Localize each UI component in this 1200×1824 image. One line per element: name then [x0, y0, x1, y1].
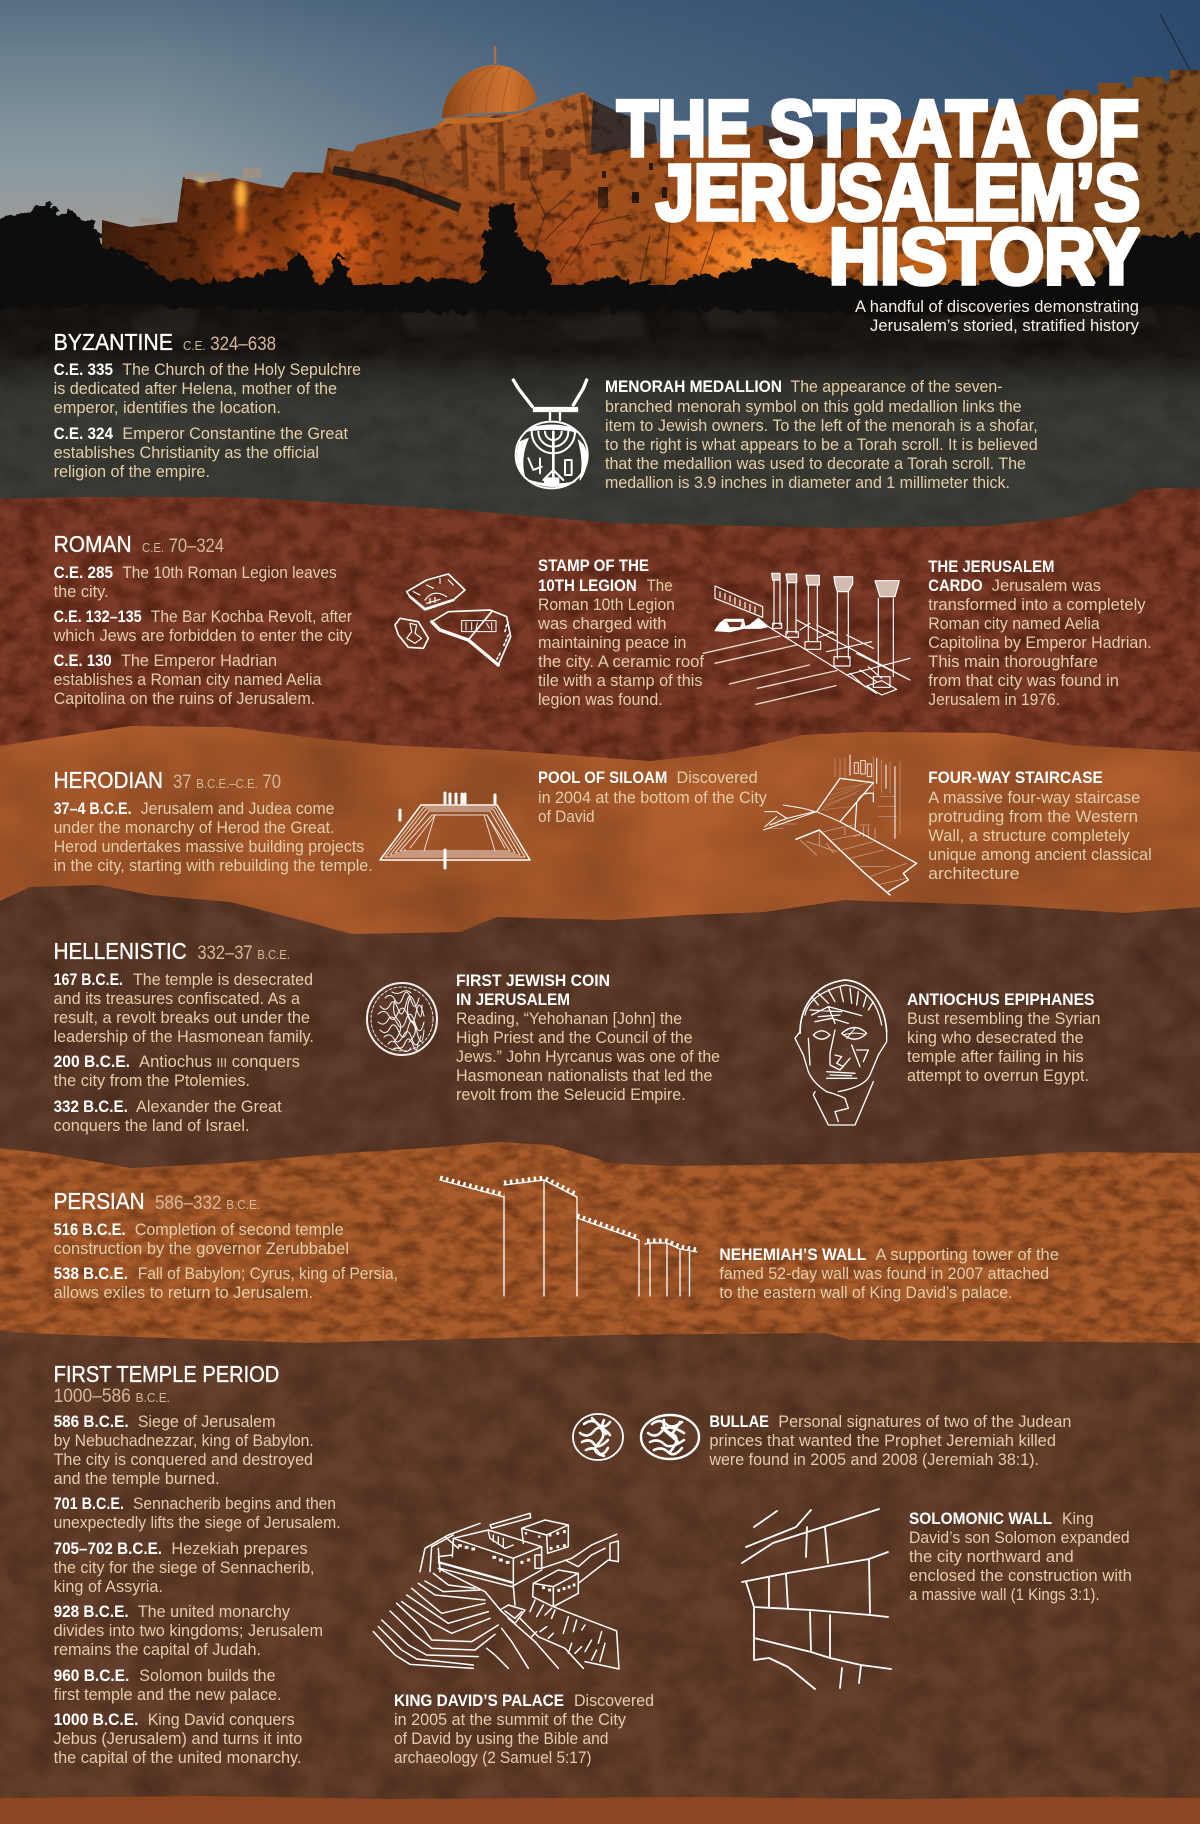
timeline text: First Temple Period: King David conquers [148, 1710, 295, 1729]
callout: bullae: princes that wanted the Prophet Jeremiah killed [709, 1431, 1056, 1450]
panel: Hellenistic [0, 885, 1200, 1175]
icon: Nehemiah's wall [440, 1178, 697, 1296]
heading: Byzantine: C.E. 324–638 [183, 334, 276, 355]
timeline text: Byzantine: establishes Christianity as the official [54, 443, 319, 462]
timeline text: Persian: 538 B.C.E. [54, 1264, 128, 1283]
callout: the Jerusalem Cardo: Jerusalem in 1976. [928, 690, 1060, 709]
callout: first Jewish coin: revolt from the Seleucid Empire. [456, 1085, 686, 1104]
panel: Persian [0, 1142, 1200, 1350]
timeline text: Herodian: in the city, starting with rebuilding the temple. [54, 856, 373, 875]
callout: four-way staircase: A massive four-way staircase [928, 788, 1140, 807]
callout: Antiochus Epiphanes: king who desecrated the [907, 1028, 1084, 1047]
callout: stamp of the 10th legion: the city. A ceramic roof [538, 652, 704, 671]
timeline text: Hellenistic: 167 B.C.E. [54, 970, 123, 989]
icon: King David's palace [373, 1513, 619, 1669]
callout: Antiochus Epiphanes: attempt to overrun Egypt. [907, 1066, 1089, 1085]
callout: Pool of Siloam: Discovered [676, 768, 758, 787]
stratum band: First Temple Period [0, 1330, 1200, 1799]
dome [433, 46, 537, 129]
callout: four-way staircase: architecture [928, 864, 1019, 883]
timeline text: Hellenistic: Alexander the Great [136, 1097, 282, 1116]
callout: menorah medallion: medallion is 3.9 inches in diameter and 1 millimeter thick. [605, 473, 1010, 492]
callout: stamp of the 10th legion: Roman 10th Legion [538, 595, 675, 614]
timeline text: Hellenistic: result, a revolt breaks out under the [54, 1008, 310, 1027]
callout: Nehemiah's wall: NEHEMIAH’S WALL [719, 1245, 866, 1264]
callout: Antiochus Epiphanes: ANTIOCHUS EPIPHANES [907, 990, 1094, 1009]
callout: the Jerusalem Cardo: transformed into a completely [928, 595, 1146, 614]
timeline text: First Temple Period: remains the capital of Judah. [54, 1640, 261, 1659]
photo: Jerusalem walls and dome at dusk [0, 0, 1200, 425]
callout: King David's palace: KING DAVID’S PALACE [394, 1691, 564, 1710]
callout: Solomonic wall: the city northward and [909, 1547, 1074, 1566]
timeline text: Hellenistic: The temple is desecrated [133, 970, 313, 989]
callout: four-way staircase: protruding from the Western [928, 807, 1138, 826]
callout: Nehemiah's wall: famed 52-day wall was found in 2007 attached [719, 1264, 1049, 1283]
callout: four-way staircase [928, 768, 1152, 883]
panel: Herodian [0, 726, 1200, 940]
callout: four-way staircase: Wall, a structure completely [928, 826, 1130, 845]
timeline text: Roman: The 10th Roman Legion leaves [122, 563, 337, 582]
heading: Persian: 586–332 B.C.E. [155, 1193, 260, 1214]
callout: King David's palace: in 2005 at the summit of the City [394, 1710, 626, 1729]
icon: four-way staircase [763, 755, 917, 895]
timeline text: First Temple Period: first temple and the new palace. [54, 1685, 282, 1704]
callout: bullae: Personal signatures of two of the Judean [778, 1412, 1071, 1431]
timeline text: Hellenistic [54, 970, 314, 1135]
callout: Solomonic wall: David’s son Solomon expanded [909, 1528, 1130, 1547]
icon: Pool of Siloam [380, 793, 530, 868]
timeline text: Byzantine: The Church of the Holy Sepulchre [122, 360, 361, 379]
heading: Persian [54, 1188, 260, 1214]
callout: Antiochus Epiphanes: Bust resembling the Syrian [907, 1009, 1100, 1028]
timeline text: First Temple Period: and the temple burned. [54, 1469, 220, 1488]
heading: Herodian: HERODIAN [54, 767, 163, 793]
timeline text: Roman: the city. [54, 582, 109, 601]
timeline text: Herodian: Jerusalem and Judea come [141, 799, 334, 818]
callout: Nehemiah's wall [719, 1245, 1059, 1302]
timeline text: First Temple Period: king of Assyria. [54, 1577, 163, 1596]
callout: the Jerusalem Cardo: Capitolina by Emperor Hadrian. [928, 633, 1152, 652]
timeline text: Hellenistic: conquers the land of Israel. [54, 1116, 249, 1135]
callout: first Jewish coin: Jews.” John Hyrcanus was one of the [456, 1047, 720, 1066]
timeline text: Hellenistic: and its treasures confiscated. As a [54, 989, 301, 1008]
timeline text: First Temple Period: Hezekiah prepares [171, 1539, 308, 1558]
heading: Hellenistic: HELLENISTIC [54, 938, 187, 964]
callout: stamp of the 10th legion: The [647, 576, 673, 595]
timeline text: Herodian: 37–4 B.C.E. [54, 799, 132, 818]
timeline text: First Temple Period: 586 B.C.E. [54, 1412, 129, 1431]
heading: First Temple Period [54, 1361, 279, 1407]
heading: Byzantine: BYZANTINE [54, 329, 173, 355]
callout: Solomonic wall: King [1062, 1509, 1094, 1528]
timeline text: Hellenistic: 200 B.C.E. [54, 1052, 130, 1071]
ground and rocks [0, 285, 1200, 425]
callout: menorah medallion: The appearance of the seven- [790, 377, 1002, 396]
timeline text: First Temple Period: Solomon builds the [139, 1666, 276, 1685]
heading: Herodian [54, 767, 281, 793]
timeline text: Roman: C.E. 130 [54, 651, 112, 670]
callout: the Jerusalem Cardo [928, 557, 1152, 709]
callout: menorah medallion: item to Jewish owners. To the left of the menorah is a shofar, [605, 416, 1038, 435]
timeline text: First Temple Period: 701 B.C.E. [54, 1494, 124, 1513]
timeline text: First Temple Period: Sennacherib begins and then [133, 1494, 336, 1513]
rooftop lights [140, 168, 262, 234]
callout: first Jewish coin: IN JERUSALEM [456, 990, 570, 1009]
timeline text: First Temple Period: 928 B.C.E. [54, 1602, 129, 1621]
callout: Nehemiah's wall: A supporting tower of the [876, 1245, 1059, 1264]
callout: stamp of the 10th legion: STAMP OF THE [538, 556, 649, 575]
timeline text: Roman: establishes a Roman city named Aelia [54, 670, 322, 689]
timeline text: Roman: Capitolina on the ruins of Jerusalem. [54, 689, 315, 708]
callout: the Jerusalem Cardo: from that city was found in [928, 671, 1119, 690]
timeline text: First Temple Period: unexpectedly lifts the siege of Jerusalem. [54, 1513, 341, 1532]
callout: first Jewish coin: FIRST JEWISH COIN [456, 971, 610, 990]
stratum band: Hellenistic [0, 885, 1200, 1175]
callout: stamp of the 10th legion: legion was found. [538, 690, 663, 709]
callout: bullae: BULLAE [709, 1412, 769, 1431]
bottom stratum [0, 1790, 1200, 1824]
callout: Antiochus Epiphanes [907, 990, 1100, 1085]
timeline text: Persian [54, 1220, 398, 1302]
subtitle: A handful of discoveries demonstrating [855, 297, 1139, 316]
timeline text: Byzantine: is dedicated after Helena, mother of the [54, 379, 337, 398]
panel: Roman [0, 488, 1200, 770]
timeline text: Persian: construction by the governor Zerubbabel [54, 1239, 349, 1258]
icon: menorah medallion [513, 380, 588, 488]
timeline text: First Temple Period: Jebus (Jerusalem) and turns it into [54, 1729, 302, 1748]
callout: menorah medallion: MENORAH MEDALLION [605, 377, 782, 396]
bare branches [527, 175, 715, 280]
timeline text: Hellenistic: 332 B.C.E. [54, 1097, 128, 1116]
callout: first Jewish coin [456, 971, 720, 1104]
callout: four-way staircase: unique among ancient classical [928, 845, 1152, 864]
callout: menorah medallion: to the right is what appears to be a Torah scroll. It is believed [605, 435, 1038, 454]
heading: Hellenistic [54, 938, 290, 964]
stratum band: Roman [0, 488, 1200, 770]
callout: Pool of Siloam: of David [538, 807, 595, 826]
timeline text: Roman: C.E. 132–135 [54, 607, 142, 626]
timeline text: Byzantine [54, 360, 361, 481]
timeline text: Roman: which Jews are forbidden to enter the city [53, 626, 352, 645]
timeline text: First Temple Period: 1000 B.C.E. [54, 1710, 138, 1729]
heading: First Temple Period: FIRST TEMPLE PERIOD [54, 1361, 279, 1387]
timeline text: Herodian: under the monarchy of Herod the Great. [54, 818, 334, 837]
timeline text: Byzantine: C.E. 335 [54, 360, 113, 379]
icon: first Jewish coin [367, 983, 437, 1055]
subtitle [855, 297, 1139, 335]
callout: stamp of the 10th legion: maintaining peace in [538, 633, 686, 652]
heading: Roman: C.E. 70–324 [142, 536, 224, 557]
title: HISTORY [829, 212, 1140, 301]
callout: first Jewish coin: Reading, “Yehohanan [John] the [456, 1009, 682, 1028]
icon: Solomonic wall [742, 1509, 891, 1689]
timeline text: Herodian: Herod undertakes massive building projects [54, 837, 364, 856]
timeline text: Roman: The Bar Kochba Revolt, after [151, 607, 352, 626]
icon: bullae [573, 1414, 699, 1460]
icon: bust of Antiochus Epiphanes [795, 980, 887, 1125]
callout: the Jerusalem Cardo: Jerusalem was [992, 576, 1101, 595]
callout: King David's palace: archaeology (2 Samuel 5:17) [394, 1748, 592, 1767]
callout: the Jerusalem Cardo: CARDO [928, 576, 983, 595]
callout: menorah medallion: that the medallion was used to decorate a Torah scroll. The [605, 454, 1026, 473]
callout: first Jewish coin: High Priest and the Council of the [456, 1028, 693, 1047]
panel: Byzantine [0, 329, 1200, 535]
timeline text: Roman: The Emperor Hadrian [121, 651, 277, 670]
callout: menorah medallion [605, 377, 1038, 492]
timeline text: Persian: allows exiles to return to Jerusalem. [54, 1283, 313, 1302]
timeline text: Herodian [54, 799, 373, 875]
heading: Persian: PERSIAN [54, 1188, 145, 1214]
callout: stamp of the 10th legion: 10TH LEGION [538, 576, 637, 595]
timeline text: Hellenistic: the city from the Ptolemies. [54, 1071, 250, 1090]
callout: King David's palace: Discovered [574, 1691, 654, 1710]
callout: first Jewish coin: Hasmonean nationalists that led the [456, 1066, 712, 1085]
callout: stamp of the 10th legion: tile with a stamp of this [538, 671, 702, 690]
callout: stamp of the 10th legion: was charged with [537, 614, 666, 633]
timeline text: Byzantine: C.E. 324 [54, 424, 113, 443]
timeline text: First Temple Period: The united monarchy [138, 1602, 290, 1621]
callout: King David's palace: of David by using the Bible and [394, 1729, 608, 1748]
callout: Pool of Siloam: in 2004 at the bottom of the City [538, 788, 767, 807]
heading: Byzantine [54, 329, 276, 355]
callout: Nehemiah's wall: to the eastern wall of King David’s palace. [719, 1283, 1012, 1302]
timeline text: Hellenistic: Antiochus III conquers [139, 1052, 300, 1071]
timeline text: Byzantine: Emperor Constantine the Great [122, 424, 348, 443]
timeline text: First Temple Period [54, 1412, 341, 1767]
timeline text: Roman: C.E. 285 [54, 563, 113, 582]
callout: Solomonic wall: enclosed the construction with [909, 1566, 1132, 1585]
callout: bullae [708, 1412, 1071, 1469]
tree and bush silhouettes [0, 206, 1200, 315]
heading: Hellenistic: 332–37 B.C.E. [197, 943, 290, 964]
timeline text: First Temple Period: Siege of Jerusalem [138, 1412, 276, 1431]
callout: Antiochus Epiphanes: temple after failing in his [907, 1047, 1084, 1066]
timeline text: First Temple Period: The city is conquered and destroyed [54, 1450, 313, 1469]
heading: Roman [54, 531, 224, 557]
title [617, 84, 1140, 301]
timeline text: Persian: Fall of Babylon; Cyrus, king of Persia, [138, 1264, 398, 1283]
panel: First Temple Period [0, 1330, 1200, 1799]
timeline text: Hellenistic: leadership of the Hasmonean family. [54, 1027, 314, 1046]
timeline text: First Temple Period: 960 B.C.E. [54, 1666, 129, 1685]
timeline text: First Temple Period: 705–702 B.C.E. [54, 1539, 162, 1558]
illuminated city walls [102, 70, 1200, 310]
callout: King David's palace [394, 1691, 654, 1767]
timeline text: Persian: 516 B.C.E. [54, 1220, 126, 1239]
timeline text: First Temple Period: the capital of the united monarchy. [54, 1748, 301, 1767]
callout: Pool of Siloam [538, 768, 767, 826]
callout: bullae: were found in 2005 and 2008 (Jeremiah 38:1). [708, 1450, 1039, 1469]
timeline text: First Temple Period: divides into two kingdoms; Jerusalem [54, 1621, 323, 1640]
callout: Solomonic wall: a massive wall (1 Kings 3:1). [909, 1585, 1100, 1604]
heading: Herodian: 37 B.C.E.–C.E. 70 [173, 772, 281, 793]
callout: the Jerusalem Cardo: Roman city named Aelia [928, 614, 1100, 633]
heading: First Temple Period: 1000–586 B.C.E. [54, 1386, 170, 1407]
subtitle: Jerusalem’s storied, stratified history [870, 316, 1139, 335]
icon: Cardo colonnade [703, 573, 910, 704]
callout: menorah medallion: branched menorah symbol on this gold medallion links the [605, 397, 1022, 416]
callout: the Jerusalem Cardo: THE JERUSALEM [928, 557, 1054, 576]
sky [0, 0, 1200, 300]
callout: four-way staircase: FOUR-WAY STAIRCASE [928, 768, 1103, 787]
timeline text: Roman [53, 563, 352, 708]
stratum band: Persian [0, 1142, 1200, 1350]
timeline text: First Temple Period: the city for the siege of Sennacherib, [54, 1558, 314, 1577]
callout: Solomonic wall: SOLOMONIC WALL [909, 1509, 1052, 1528]
icon: roof tile fragments [395, 574, 511, 665]
timeline text: Persian: Completion of second temple [135, 1220, 344, 1239]
stratum band: Herodian [0, 726, 1200, 940]
heading: Roman: ROMAN [54, 531, 132, 557]
callout: Pool of Siloam: POOL OF SILOAM [538, 768, 667, 787]
timeline text: Byzantine: emperor, identifies the location. [54, 398, 281, 417]
timeline text: First Temple Period: by Nebuchadnezzar, king of Babylon. [54, 1431, 314, 1450]
antenna [1160, 14, 1190, 70]
stratum band: Byzantine [0, 350, 1200, 535]
timeline text: Byzantine: religion of the empire. [54, 462, 210, 481]
callout: Solomonic wall [909, 1509, 1132, 1604]
callout: stamp of the 10th legion [537, 556, 704, 709]
callout: the Jerusalem Cardo: This main thoroughfare [928, 652, 1098, 671]
